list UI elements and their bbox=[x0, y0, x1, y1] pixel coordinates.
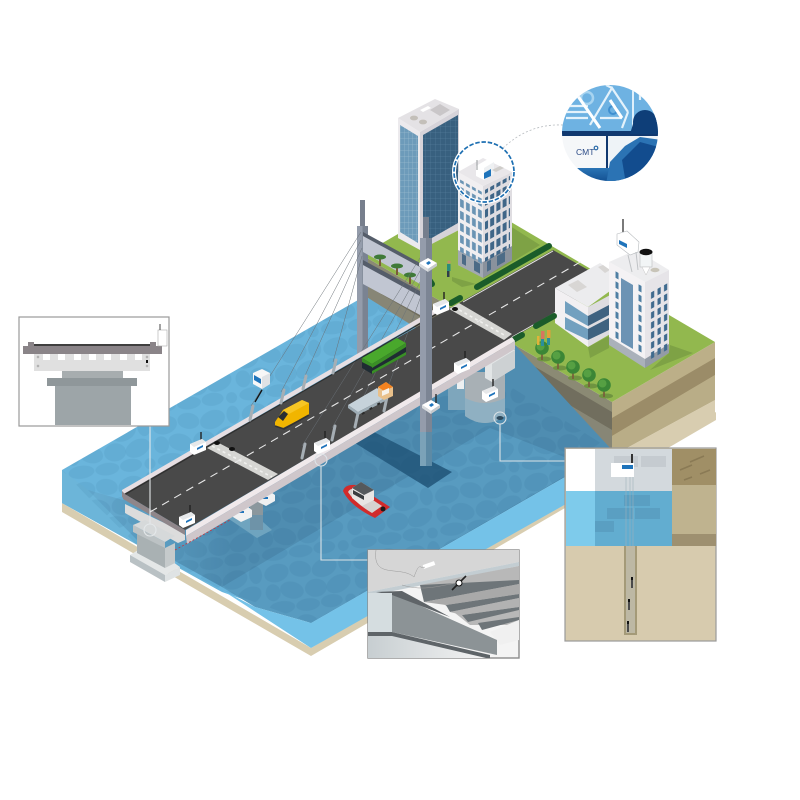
soil strata bbox=[672, 449, 716, 546]
inset panel: underside of deck bbox=[368, 550, 519, 658]
road white edge lines on land bbox=[463, 251, 556, 337]
wired sensors bbox=[376, 550, 466, 590]
bridge deck rails and joints bbox=[122, 303, 515, 544]
main beam bbox=[368, 591, 497, 658]
cable anchor posts bbox=[250, 360, 387, 458]
bearing band bbox=[34, 354, 150, 371]
river pier bbox=[448, 346, 515, 423]
land block with soil layers bbox=[362, 195, 715, 472]
infographic: isometric bridge monitoring scene bbox=[18, 85, 717, 659]
boat bbox=[343, 482, 390, 518]
weather station on roof bbox=[617, 219, 660, 275]
cables bbox=[251, 232, 425, 446]
pedestrians bbox=[447, 260, 550, 346]
deck end band bbox=[125, 504, 185, 543]
sensor bbox=[158, 324, 167, 346]
air band bbox=[566, 449, 672, 491]
callout line: bottom inset bbox=[315, 454, 368, 560]
mid-rise building with roof station bbox=[458, 158, 512, 278]
bridge sensors bbox=[179, 292, 498, 528]
borehole bbox=[624, 477, 637, 635]
callout line: right inset bbox=[494, 412, 565, 461]
water band bbox=[566, 491, 672, 546]
logger box bbox=[611, 454, 634, 477]
tower shadow on water bbox=[350, 430, 452, 488]
back pier bbox=[223, 490, 275, 538]
road surface bbox=[123, 250, 620, 530]
red dotted measurement line bbox=[175, 520, 230, 550]
cube sensor on cable bbox=[253, 369, 270, 402]
tower cross beams bbox=[363, 232, 420, 315]
deck soffit bbox=[368, 550, 519, 592]
right tower column in front of deck bbox=[419, 217, 440, 466]
deck beam bbox=[23, 342, 162, 354]
photo circle: control room bbox=[562, 85, 658, 181]
left tower column bbox=[357, 200, 368, 356]
logo text: CMT bbox=[576, 147, 594, 157]
roadside trees bbox=[535, 341, 613, 398]
sand base of the model bbox=[62, 412, 716, 656]
dotted connector to photo bbox=[503, 125, 563, 148]
pier column bbox=[47, 371, 137, 425]
cross girders bbox=[420, 566, 519, 645]
bus bbox=[362, 338, 406, 374]
callout line: left inset bbox=[144, 426, 156, 536]
road centre dashes bbox=[150, 261, 582, 512]
hedges and lawn planting bbox=[430, 246, 554, 340]
low office building bbox=[555, 263, 625, 347]
flatbed truck bbox=[348, 382, 393, 415]
shadows on lawn bbox=[452, 226, 693, 370]
main right building with weather station bbox=[609, 219, 669, 368]
tall glass office tower bbox=[398, 99, 459, 250]
dashed highlight circle around roof station bbox=[454, 142, 514, 202]
water slab bbox=[62, 296, 612, 648]
front pier under deck bbox=[130, 520, 180, 582]
inset panel: borehole section bbox=[565, 448, 716, 641]
delivery van bbox=[275, 400, 309, 429]
inset panel: pier elevation bbox=[19, 317, 169, 426]
